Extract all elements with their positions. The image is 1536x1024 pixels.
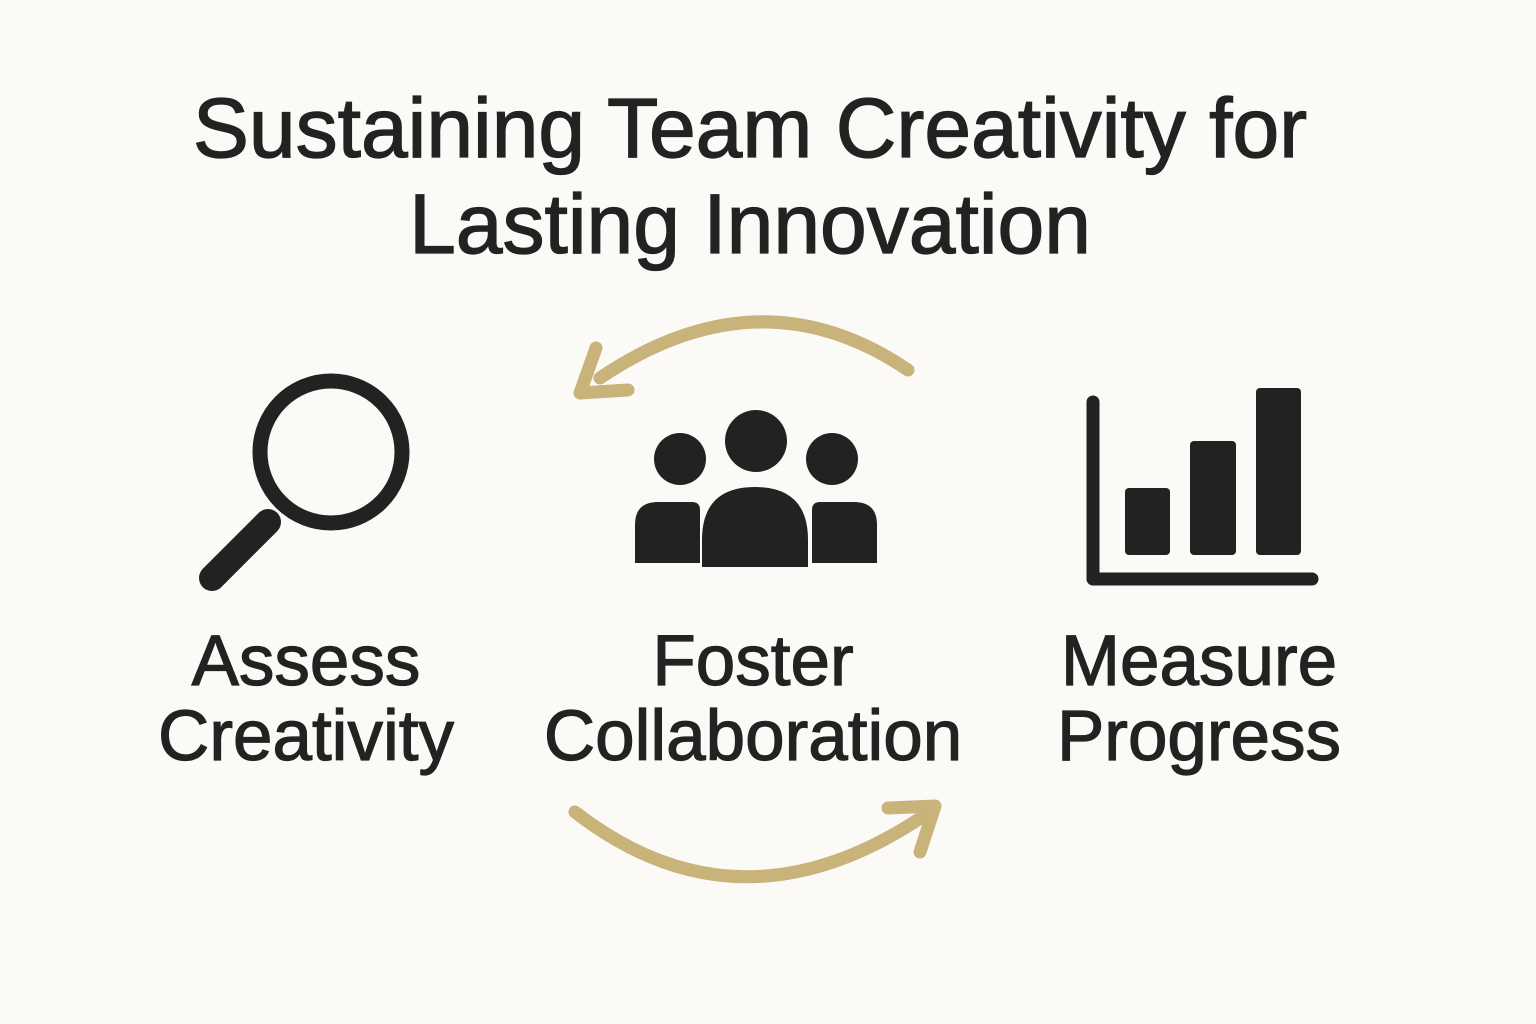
label: Foster Collaboration: Collaboration — [544, 697, 962, 776]
label: Measure Progress: Progress — [1057, 697, 1341, 776]
icon: bar chart — [1093, 388, 1312, 579]
icon: team people — [635, 410, 877, 567]
arrow: bottom cycle arrow — [575, 806, 935, 877]
title: Sustaining Team Creativity for — [193, 81, 1307, 175]
arrow: top cycle arrow — [580, 322, 908, 393]
icon: magnifying glass — [212, 381, 402, 578]
title — [193, 81, 1307, 272]
label: Foster Collaboration: Foster — [652, 622, 854, 701]
label: Measure Progress: Measure — [1061, 622, 1337, 701]
label: Measure Progress — [1057, 622, 1341, 776]
title: Lasting Innovation — [409, 177, 1091, 271]
label: Assess Creativity: Creativity — [158, 697, 454, 776]
label: Assess Creativity: Assess — [192, 622, 420, 701]
label: Assess Creativity — [158, 622, 455, 776]
label: Foster Collaboration — [544, 622, 962, 776]
